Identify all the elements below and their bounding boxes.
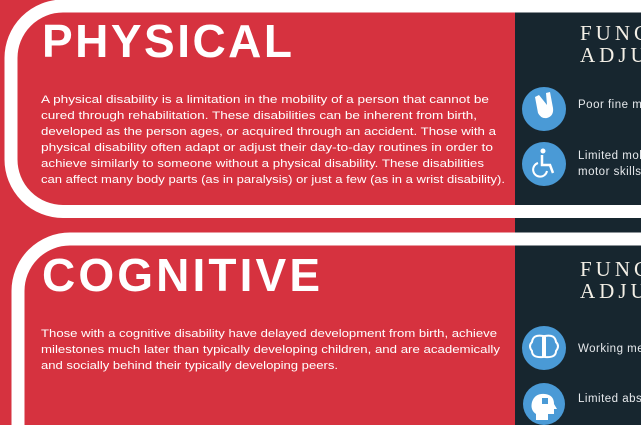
text block: physical description: achieve similarly to someone without a physical disability. These disabilities: [41, 158, 484, 170]
text block: physical description: physical disability often adapt or adjust their day-to-day routines in order to: [41, 142, 493, 154]
text block: physical description: cured through rehabilitation. These disabilities can be inherent from birth,: [41, 110, 477, 122]
heading: functional adjustments (physical): [580, 21, 641, 67]
text: limited mobility: motor skills: [578, 166, 641, 178]
white outline: cognitive: [18, 239, 641, 425]
text block: physical description: A physical disability is a limitation in the mobility of a person that cannot be: [41, 94, 489, 106]
white outline: physical: [11, 6, 641, 212]
icon: wheelchair: [522, 142, 566, 186]
icon: head with puzzle: [523, 383, 565, 425]
text block: physical description: developed as the person ages, or acquired through an accident. Those with a: [41, 126, 497, 138]
dark panel column: [515, 0, 641, 425]
text block: physical description: can affect many body parts (as in paralysis) or just a few (as in a wrist disability).: [41, 174, 505, 186]
heading: physical: PHYSICAL: [42, 15, 292, 67]
text block: cognitive description: milestones much later than typically developing children, and are academically: [41, 344, 500, 356]
text: limited mobility: [578, 150, 641, 178]
text block: cognitive description: [41, 328, 500, 372]
text block: physical description: [41, 94, 505, 186]
icon: hand: [522, 87, 566, 131]
icon: brain: [522, 326, 566, 370]
text block: cognitive description: and socially behind their typically developing peers.: [41, 360, 338, 372]
text block: cognitive description: Those with a cognitive disability have delayed development from birth, achieve: [41, 328, 497, 340]
heading: cognitive: COGNITIVE: [42, 249, 320, 301]
heading: functional adjustments (cognitive): [580, 257, 641, 303]
